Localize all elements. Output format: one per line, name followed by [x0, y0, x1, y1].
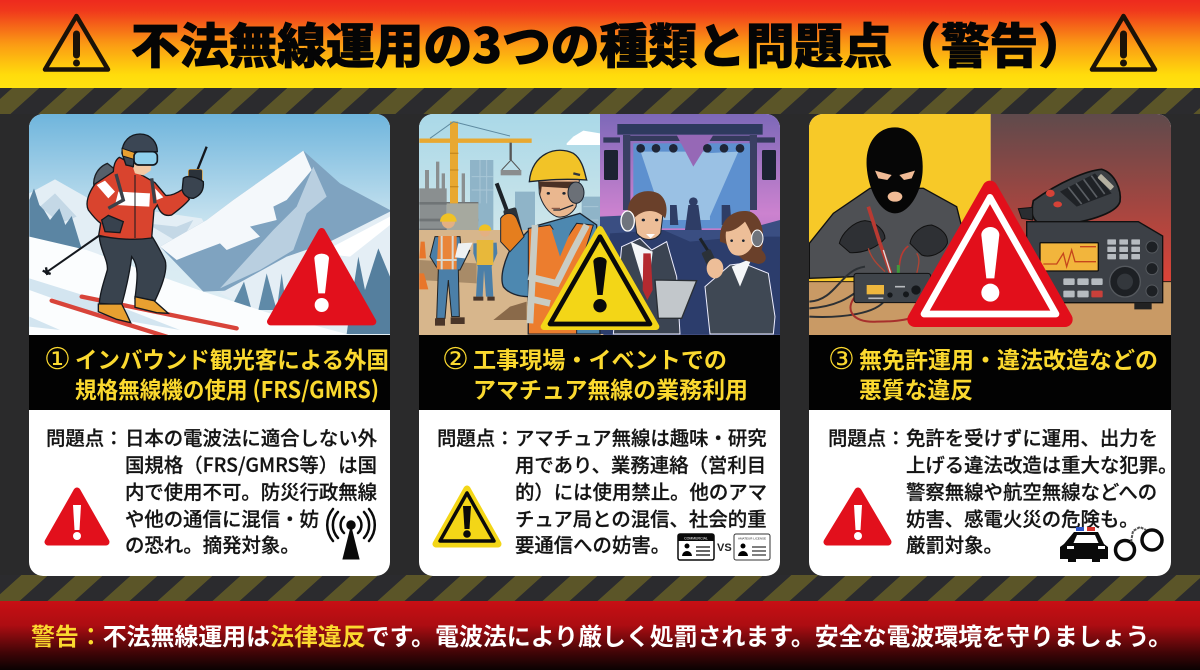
sub: masked figure — [809, 127, 963, 278]
problem description: の恐れ。摘発対象。 — [125, 529, 300, 558]
problem description: 妨害、感電火災の危険も。 — [906, 503, 1139, 532]
icon: small yellow warning — [436, 489, 498, 544]
icon: small red warning — [827, 491, 888, 542]
sub: helmet, goggles and face — [122, 134, 157, 175]
icon: left warning triangle — [45, 16, 108, 70]
sub: tower crane — [419, 122, 532, 203]
panel: construction and events — [417, 112, 783, 576]
panel: inbound tourists — [27, 112, 393, 576]
problem description — [437, 422, 767, 558]
sub: skis and poles — [43, 235, 237, 337]
problem description: 問題点： — [437, 422, 515, 451]
icon: commercial vs amateur licence cards: COMMERCIAL — [684, 536, 708, 540]
icon: commercial vs amateur licence cards: VS — [717, 542, 732, 554]
heading text — [473, 341, 748, 405]
sub: large red warning triangle — [915, 188, 1065, 319]
heading band — [29, 335, 390, 410]
sub: microphone — [1018, 169, 1120, 226]
illustration: site worker and event staff — [417, 112, 783, 340]
sub: stage with truss and lights — [600, 124, 780, 334]
icon: radio antenna — [327, 509, 375, 559]
problem description: や他の通信に混信・妨 — [125, 503, 319, 532]
heading text — [859, 341, 1158, 405]
illustration: skier with radio and mountains — [27, 112, 393, 338]
sub: background workers — [430, 213, 497, 326]
sub: handheld radio — [182, 147, 207, 198]
heading band — [419, 335, 780, 410]
sub: red warning triangle — [271, 232, 373, 322]
sub: red jacket — [87, 157, 189, 239]
heading text — [75, 341, 389, 405]
heading band — [809, 335, 1171, 410]
icon: commercial vs amateur licence cards: AMATEUR LICENSE — [738, 536, 766, 540]
header banner — [0, 0, 1200, 88]
sub: event staff man — [613, 191, 697, 334]
problem description: 厳罰対象。 — [906, 529, 1003, 558]
problem description: 国規格（FRS/GMRS等）は国 — [125, 449, 377, 478]
problem description: 警察無線や航空無線などへの — [906, 476, 1157, 505]
sub: transceiver — [1027, 222, 1163, 309]
number marker: ② — [442, 342, 469, 377]
problem description — [46, 422, 378, 558]
icon: small red warning — [48, 491, 106, 542]
warning sentence: 警告：不法無線運用は法律違反です。電波法により厳しく処罰されます。安全な電波環境を守りましょう。 — [31, 617, 1172, 652]
sub: trousers and boots — [98, 236, 168, 323]
icon: police car — [1060, 527, 1108, 562]
sub: city and scaffolding — [419, 160, 600, 230]
title: 不法無線運用の3つの種類と問題点（警告） — [131, 7, 1087, 77]
problem description: チュア局との混信、社会的重 — [515, 503, 766, 532]
heading text: インバウンド観光客による外国 — [75, 341, 389, 375]
problem description — [828, 422, 1177, 558]
hazard stripes: top band — [0, 88, 1200, 114]
sub: probes and wires — [809, 207, 919, 322]
icon: commercial vs amateur licence cards — [678, 534, 770, 560]
problem description: 用であり、業務連絡（営利目 — [515, 449, 766, 478]
sub: opened radio unit — [854, 273, 931, 303]
heading text: 工事現場・イベントでの — [473, 341, 727, 375]
problem description: 上げる違法改造は重大な犯罪。 — [906, 449, 1177, 478]
problem description: 問題点： — [828, 422, 906, 451]
footer warning banner — [0, 601, 1200, 670]
problem description: 的）には使用禁止。他のアマ — [515, 476, 767, 505]
problem description: 要通信への妨害。 — [515, 529, 670, 558]
hazard stripes: bottom band — [0, 575, 1200, 601]
icon: handcuffs — [1116, 527, 1162, 560]
sub: main worker — [497, 150, 600, 334]
problem description: 問題点： — [46, 422, 124, 451]
sub: yellow warning triangle — [544, 229, 656, 327]
problem description: 内で使用不可。防災行政無線 — [125, 476, 378, 505]
heading text: 規格無線機の使用 (FRS/GMRS) — [75, 371, 379, 405]
heading text: 無免許運用・違法改造などの — [859, 341, 1158, 375]
number marker: ① — [44, 342, 71, 377]
sub: event staff woman — [700, 211, 775, 334]
icon: right warning triangle — [1092, 16, 1155, 70]
heading text: アマチュア無線の業務利用 — [473, 371, 748, 405]
problem description: 日本の電波法に適合しない外 — [125, 422, 378, 451]
problem description: 免許を受けずに運用、出力を — [906, 422, 1158, 451]
panel: unlicensed and illegal modification — [807, 112, 1177, 576]
number marker: ③ — [828, 342, 855, 377]
illustration: masked man modifying a radio — [807, 112, 1174, 338]
heading text: 悪質な違反 — [859, 371, 973, 405]
problem description: アマチュア無線は趣味・研究 — [515, 422, 767, 451]
sub: cones — [419, 242, 428, 289]
